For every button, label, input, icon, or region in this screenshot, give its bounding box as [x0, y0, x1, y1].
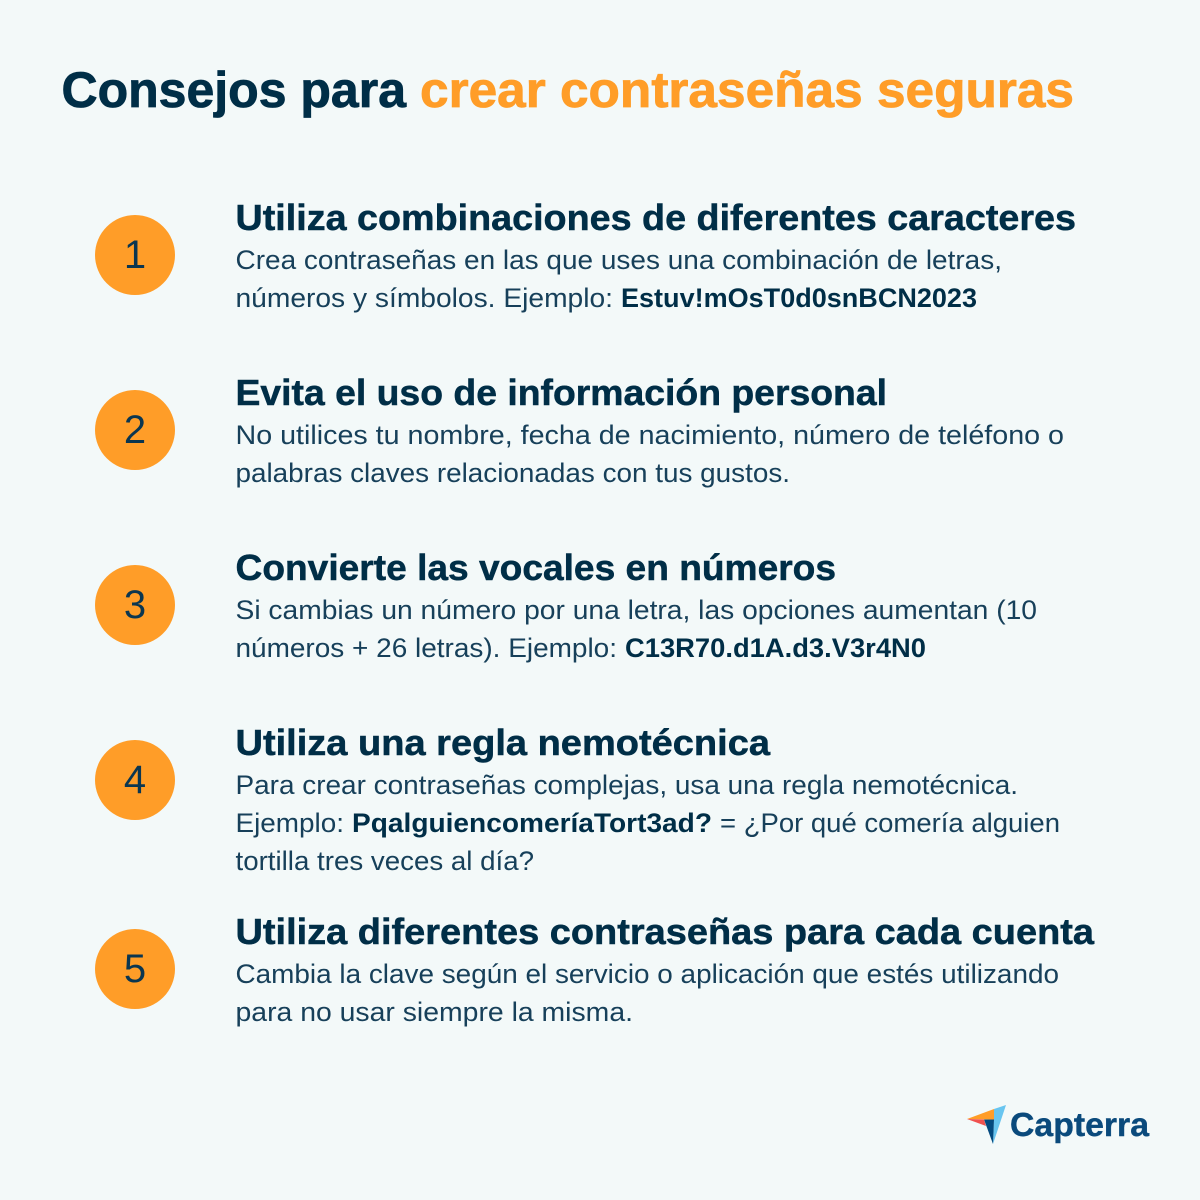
- icon: Capterra paper plane: [967, 1105, 1006, 1144]
- tip 5: [95, 911, 1095, 1027]
- tip 3 heading: Convierte las vocales en números: [236, 547, 836, 588]
- tip 1 body: Crea contraseñas en las que uses una combinación de letras,: [236, 245, 1002, 275]
- number badge 5: [95, 929, 175, 1009]
- tip 3 body: [236, 595, 1037, 663]
- tip 5 body: [236, 959, 1059, 1027]
- number badge 4: [95, 740, 175, 820]
- title: Consejos para: [62, 62, 407, 118]
- tip 2: [95, 372, 1064, 488]
- number badge 3: [95, 565, 175, 645]
- tip 4 body: tortilla tres veces al día?: [236, 846, 534, 876]
- title: [62, 62, 1074, 118]
- tip 5 body: Cambia la clave según el servicio o aplicación que estés utilizando: [236, 959, 1059, 989]
- tip 4: [95, 722, 1060, 876]
- tip 4 body: Para crear contraseñas complejas, usa una regla nemotécnica.: [236, 770, 1018, 800]
- tip 3 body: C13R70.d1A.d3.V3r4N0: [625, 633, 926, 663]
- tip 1 body: Estuv!mOsT0d0snBCN2023: [621, 283, 977, 313]
- tip 1 heading: Utiliza combinaciones de diferentes caracteres: [236, 197, 1076, 238]
- title: crear contraseñas seguras: [420, 62, 1074, 118]
- tip 1: [95, 197, 1076, 313]
- tip 4 body: [236, 770, 1060, 876]
- number badge 4: 4: [124, 758, 146, 802]
- number badge 5: 5: [124, 947, 146, 991]
- tip 2 body: palabras claves relacionadas con tus gustos.: [236, 458, 790, 488]
- tip 5 heading: Utiliza diferentes contraseñas para cada cuenta: [236, 911, 1095, 952]
- Capterra wordmark: Capterra: [1010, 1106, 1150, 1143]
- number badge 2: 2: [124, 408, 146, 452]
- tip 1 body: números y símbolos. Ejemplo:: [236, 283, 613, 313]
- number badge 1: [95, 215, 175, 295]
- tip 4 body: PqalguiencomeríaTort3ad?: [352, 808, 712, 838]
- tip 2 body: No utilices tu nombre, fecha de nacimiento, número de teléfono o: [236, 420, 1064, 450]
- tip 4 body: Ejemplo:: [236, 808, 344, 838]
- tip 4 body: = ¿Por qué comería alguien: [720, 808, 1060, 838]
- tip 2 heading: Evita el uso de información personal: [236, 372, 887, 413]
- number badge 3: 3: [124, 583, 146, 627]
- tip 2 body: [236, 420, 1064, 488]
- Capterra logo: [967, 1105, 1150, 1144]
- number badge 2: [95, 390, 175, 470]
- tip 3: [95, 547, 1037, 663]
- tip 1 body: [236, 245, 1002, 313]
- number badge 1: 1: [124, 233, 146, 277]
- tip 3 body: Si cambias un número por una letra, las opciones aumentan (10: [236, 595, 1037, 625]
- tip 4 heading: Utiliza una regla nemotécnica: [236, 722, 771, 763]
- tip 3 body: números + 26 letras). Ejemplo:: [236, 633, 617, 663]
- tip 5 body: para no usar siempre la misma.: [236, 997, 633, 1027]
